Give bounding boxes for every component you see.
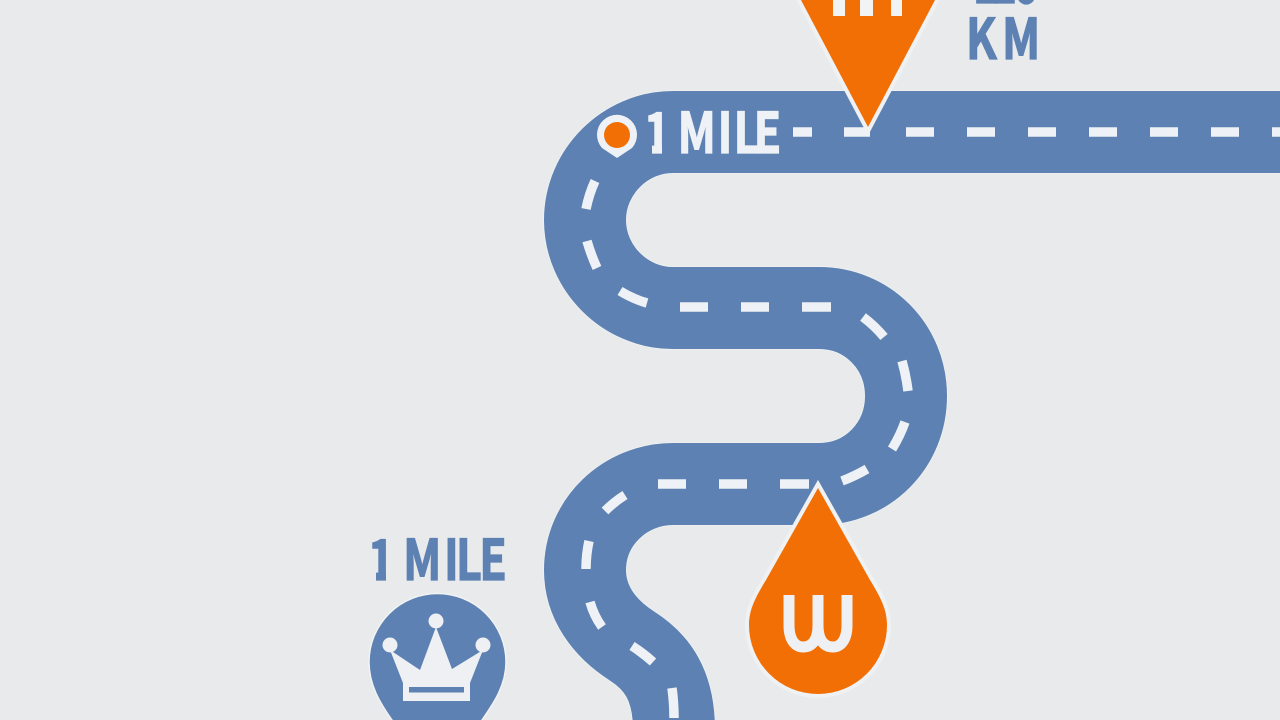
icon: crown: [382, 614, 490, 701]
blue pin with crown icon: [369, 594, 506, 720]
location marker on road: [597, 115, 637, 158]
road centre dashes: [586, 132, 1280, 718]
orange drop pin with W icon: [749, 488, 887, 694]
label: 1 MILE: 1 MILE: [368, 515, 507, 597]
orange pin at top with building icon: [796, 0, 940, 127]
winding road: [585, 132, 1280, 720]
road label: 1 MILE: 1 MILE: [644, 88, 781, 170]
icon: W glyph: [789, 595, 847, 647]
icon: building columns: [833, 0, 902, 16]
